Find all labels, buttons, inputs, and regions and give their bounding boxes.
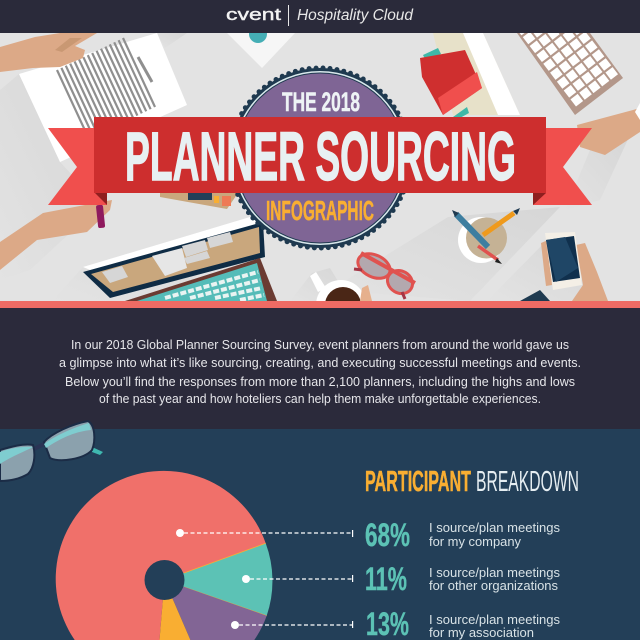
stat: 11%: for other organizations xyxy=(429,578,558,593)
icon: hand holding pen xyxy=(0,200,112,270)
icon: keyboard xyxy=(517,33,623,115)
leader dots xyxy=(176,529,353,629)
leader lines xyxy=(184,533,352,625)
stat: 11% xyxy=(365,561,560,597)
coral divider bar xyxy=(0,301,640,308)
stat: 11%: 11% xyxy=(365,561,407,597)
slice: 13% purple xyxy=(164,580,267,640)
stat: 13%: I source/plan meetings xyxy=(429,612,560,627)
badge xyxy=(230,68,410,248)
badge text: THE 2018: THE 2018 xyxy=(282,87,360,117)
header bar xyxy=(0,0,640,33)
hero illustration panel xyxy=(0,33,640,301)
intro panel xyxy=(0,308,640,429)
icon: hand on right xyxy=(577,103,640,155)
stat: 13% xyxy=(366,606,560,640)
intro text: of the past year and how hoteliers can help them make unforgettable experiences. xyxy=(99,392,541,406)
stat: 68%: I source/plan meetings xyxy=(429,520,560,535)
slice: 11% teal xyxy=(164,543,272,616)
intro text: Below you’ll find the responses from more than 2,100 planners, including the highs and lows xyxy=(65,375,575,389)
ribbon banner xyxy=(48,117,592,205)
stat: 68%: 68% xyxy=(365,517,410,553)
icon: laptop xyxy=(83,217,277,301)
long shadows xyxy=(166,33,627,282)
pie chart xyxy=(56,471,272,640)
logo: Hospitality Cloud: Hospitality Cloud xyxy=(297,7,414,24)
icon: smartphone with hand xyxy=(520,232,608,301)
icon: hand holding document xyxy=(0,33,97,72)
badge text: INFOGRAPHIC: INFOGRAPHIC xyxy=(266,195,374,226)
icon: document sheet xyxy=(19,33,187,162)
intro text xyxy=(59,338,581,406)
icon: red glasses xyxy=(354,249,417,299)
intro text: a glimpse into what it’s like sourcing, creating, and executing successful meetings and events. xyxy=(59,356,581,370)
logo: cvent: cvent xyxy=(226,5,281,24)
icon: teal glasses xyxy=(0,421,103,481)
stat: 68% xyxy=(365,517,560,553)
icon: pen cup xyxy=(452,208,520,264)
participant breakdown panel xyxy=(0,421,640,640)
heading: PARTICIPANT BREAKDOWN: PARTICIPANT xyxy=(365,466,471,498)
intro text: In our 2018 Global Planner Sourcing Survey, event planners from around the world gave us xyxy=(71,338,569,352)
icon: notebook xyxy=(420,33,520,119)
icon: tablet under ribbon xyxy=(160,193,238,209)
slice: 8% orange xyxy=(160,580,190,640)
stat: 13%: for my association xyxy=(429,625,534,640)
icon: coffee mug xyxy=(310,272,372,301)
stat: 11%: I source/plan meetings xyxy=(429,565,560,580)
stat: 68%: for my company xyxy=(429,534,521,549)
icon: envelope with seal xyxy=(227,33,295,68)
